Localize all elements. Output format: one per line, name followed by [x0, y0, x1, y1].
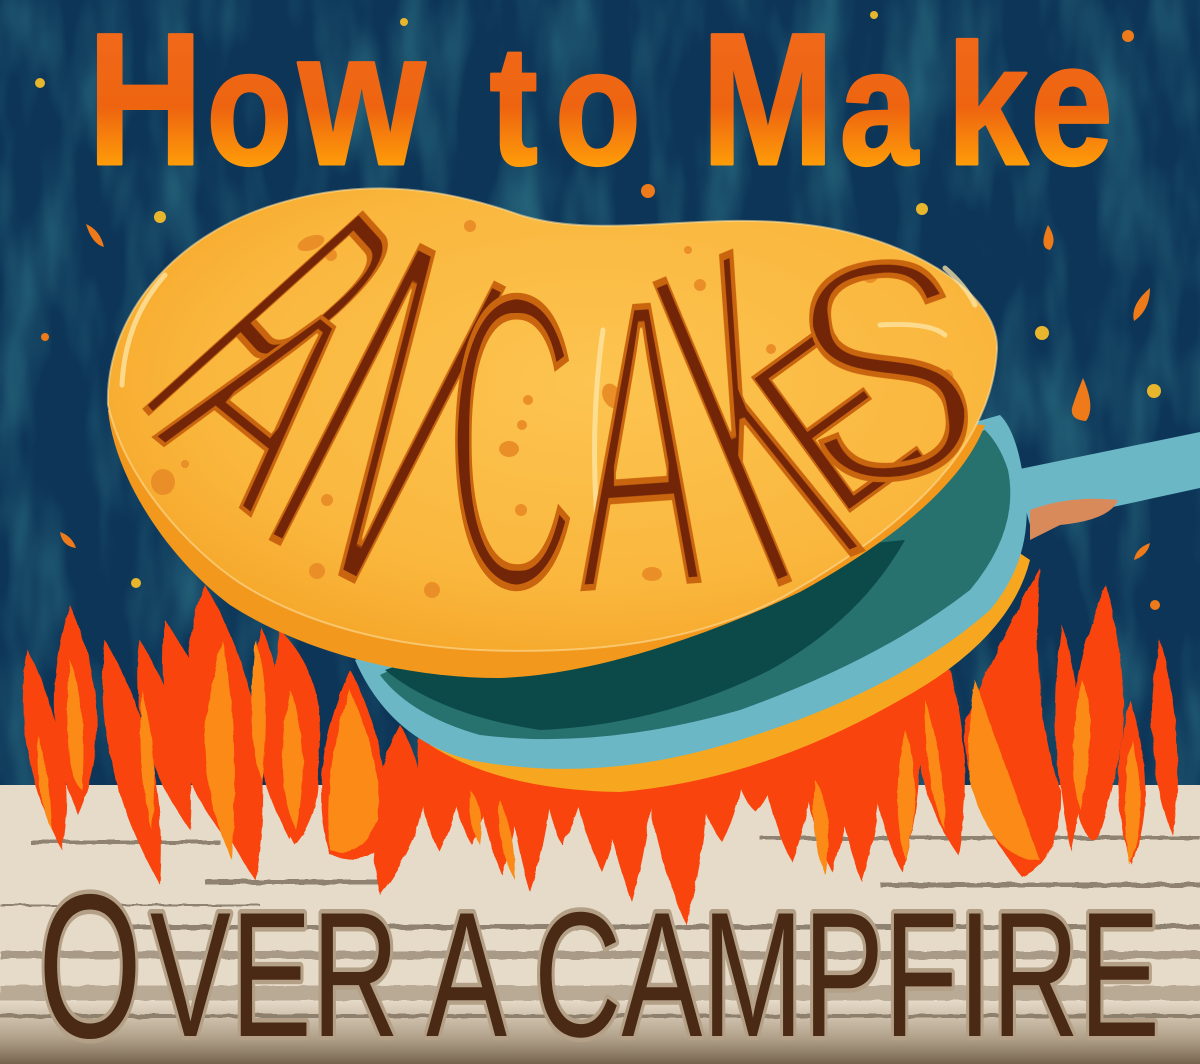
- wooden ground: [0, 785, 1200, 1064]
- night sky background: [0, 0, 1200, 800]
- pancake bubbles: [151, 220, 957, 598]
- pan underside: [430, 540, 1030, 792]
- pancake highlights: [122, 268, 975, 520]
- title: How to Make: M: [701, 0, 834, 204]
- title: How to Make: H: [88, 0, 203, 204]
- flames: [23, 568, 1178, 925]
- pancake: [63, 137, 999, 692]
- title: PANCAKES: A: [578, 205, 705, 685]
- pancake top: [108, 188, 997, 651]
- title: How to Make: e: [1030, 7, 1113, 202]
- pan inner shadow: [385, 540, 905, 730]
- title: PANCAKES: A: [107, 227, 422, 571]
- title: How to Make: a: [840, 15, 919, 200]
- pan inner surface: [380, 430, 1010, 739]
- pancake underside: [108, 400, 985, 678]
- title: How to Make: o: [207, 15, 292, 200]
- title: PANCAKES: [63, 137, 999, 692]
- title: PANCAKES: K: [597, 142, 911, 692]
- title: PANCAKES: P: [63, 138, 480, 524]
- title: PANCAKES: S: [771, 181, 999, 560]
- flames: orange layer: [38, 640, 1141, 880]
- handle rust patch: [1030, 499, 1118, 540]
- flames: red layer: [23, 568, 1178, 925]
- pan rim: [355, 415, 1027, 769]
- title: How to Make: t: [490, 11, 538, 201]
- frying pan: [355, 415, 1200, 792]
- title: PANCAKES: N: [206, 137, 570, 688]
- title: How to Make: o: [555, 15, 680, 200]
- pan handle: [1015, 432, 1200, 525]
- title: PANCAKES: C: [445, 202, 579, 682]
- embers: [35, 11, 1161, 610]
- title: PANCAKES: E: [706, 272, 965, 566]
- title: How to Make: k: [947, 9, 1028, 201]
